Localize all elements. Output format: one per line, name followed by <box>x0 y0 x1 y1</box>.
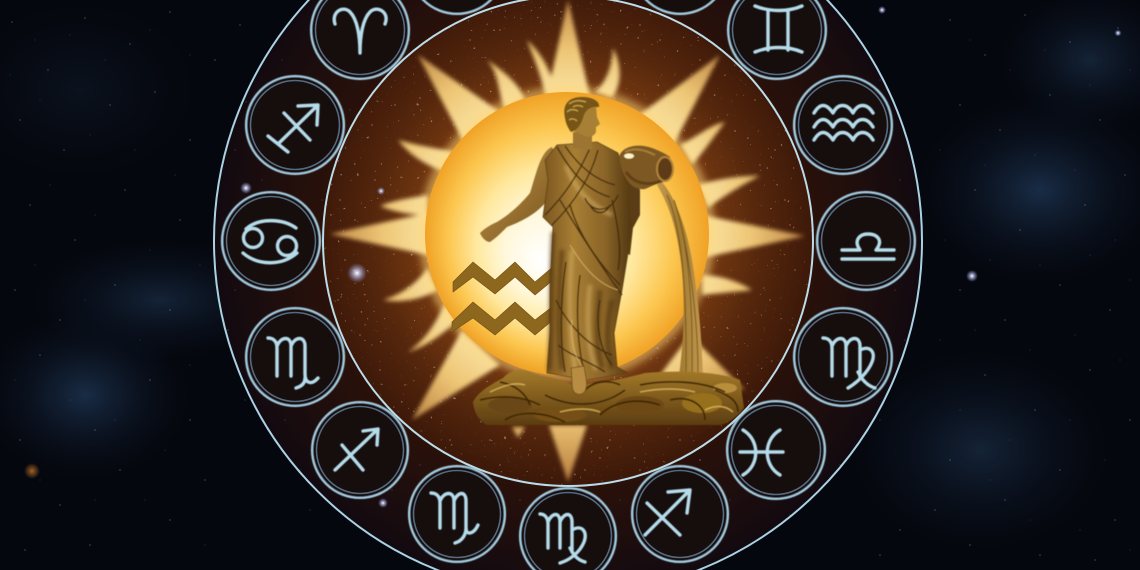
inner disc with warm glow <box>323 0 813 490</box>
icon: sagittarius bottom right <box>645 490 690 535</box>
sun disc <box>419 86 715 382</box>
icon: virgo right <box>823 338 875 388</box>
icon: virgo bottom <box>540 514 585 563</box>
zodiac badges <box>222 0 915 570</box>
icon: scorpio left <box>268 338 318 388</box>
water stream <box>657 180 703 376</box>
feet <box>571 366 587 394</box>
water jar <box>619 146 673 189</box>
outer zodiac ring <box>214 0 922 570</box>
icon: aries <box>334 9 386 53</box>
hanging drape by jar arm <box>612 155 640 255</box>
icon: sagittarius lower left <box>335 429 378 470</box>
sun rays <box>330 0 805 482</box>
statue: water bearer <box>473 97 744 425</box>
icon: gemini <box>755 6 802 52</box>
rocky base <box>473 370 744 425</box>
badge inner rings <box>226 0 910 570</box>
robe shading <box>549 232 612 370</box>
bright star accents <box>240 182 388 508</box>
icon: aquarius waves <box>814 106 873 140</box>
icon: sagittarius upper left <box>268 105 318 152</box>
neck and head <box>564 97 600 150</box>
zodiac glyphs <box>243 6 894 563</box>
raised arm and hand <box>480 147 560 242</box>
robe <box>543 142 632 380</box>
icon: pisces <box>740 430 783 475</box>
icon: libra <box>842 234 894 259</box>
robe folds <box>545 146 622 375</box>
glowing star in the disc <box>347 263 367 283</box>
aquarius symbol <box>452 262 556 335</box>
icon: scorpio bottom <box>431 493 478 543</box>
distant stars <box>24 6 1122 479</box>
icon: cancer <box>243 221 297 263</box>
